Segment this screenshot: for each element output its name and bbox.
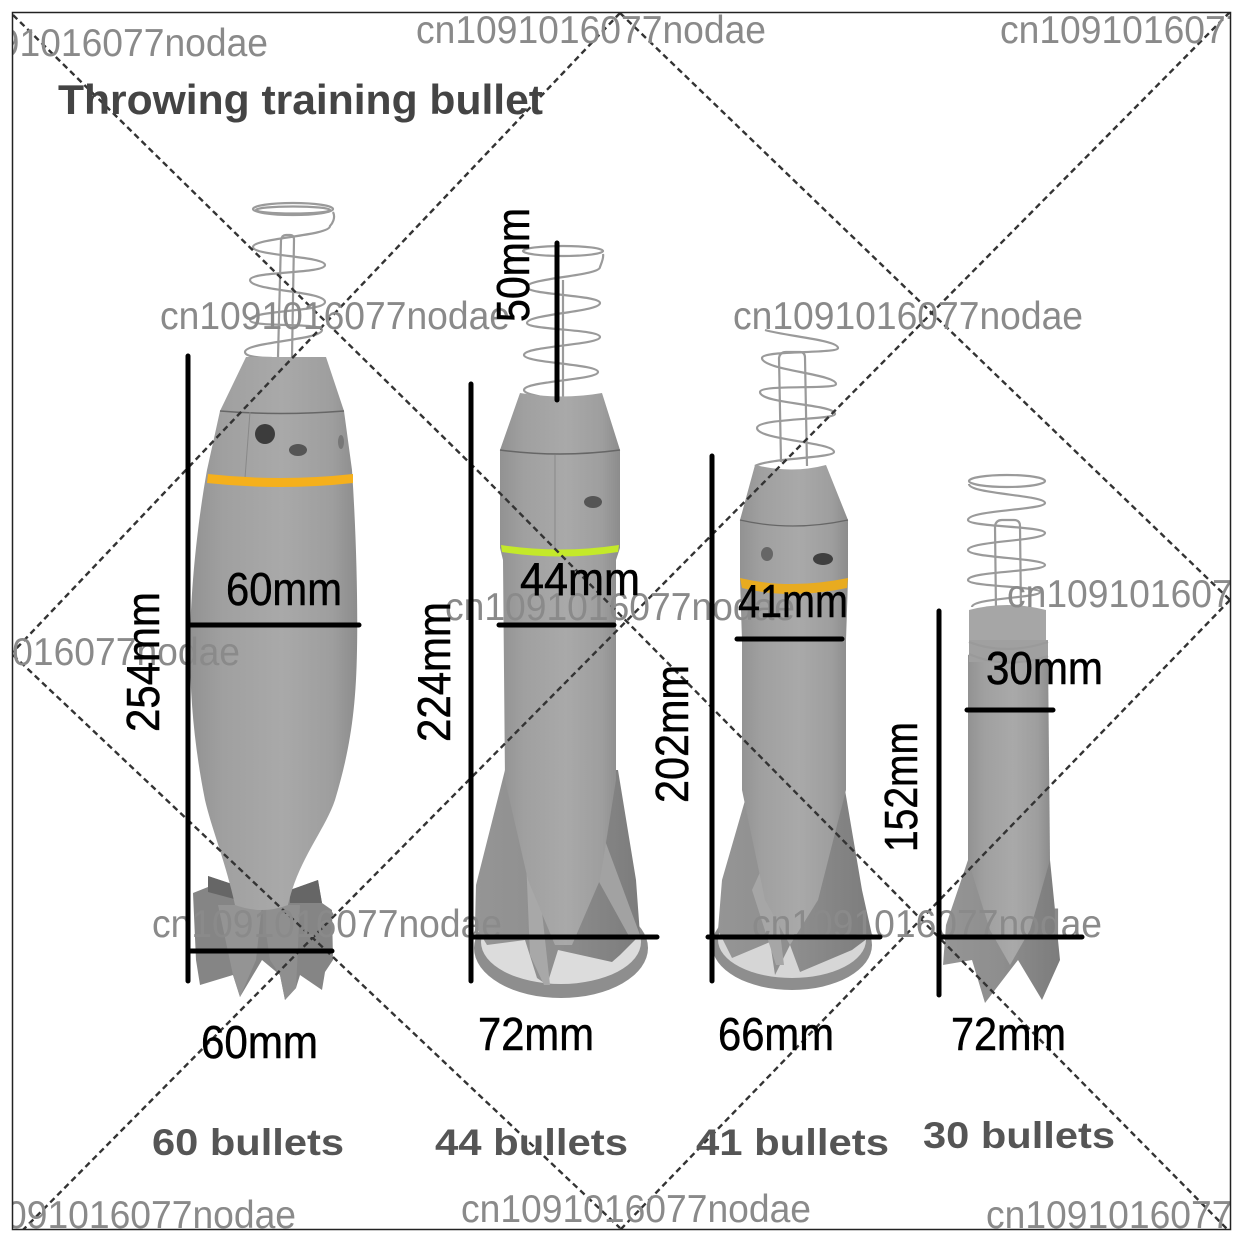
watermark text: cn1091016077nodae [733,295,1083,338]
dimension labels: 60mm [201,1016,318,1068]
hole 44 [584,496,602,508]
dimension labels: 44mm [520,553,640,605]
caption: 30 bullets: 30 bullets [923,1115,1115,1156]
watermark text: cn1091016077nodae [160,295,510,338]
fins 60 [193,876,333,1000]
dimension lines [188,243,1082,995]
caption: 41 bullets: 41 bullets [696,1122,889,1163]
bullet 30: slim model with fins [943,475,1060,1003]
bullet 41: short model with base ring [712,330,872,990]
dimension labels: 41mm [738,575,848,627]
title: Throwing training bullet [58,76,543,123]
dimension labels: 50mm [487,208,539,322]
green band 44 [501,545,619,556]
spring 41 [755,330,838,466]
spring 30 [968,475,1045,612]
dimension labels: 152mm [875,722,927,852]
dimension labels: 30mm [986,642,1103,694]
watermark text: cn1091016077nodae [752,903,1102,946]
holes 60 [255,424,344,456]
dimension labels: 66mm [718,1008,834,1060]
fins 44 [475,770,640,985]
spring 44 [523,246,603,400]
fins 41 [718,790,872,975]
dimension labels: 254mm [117,592,169,732]
body 44 [500,393,620,945]
dimension labels: 60mm [226,563,342,615]
body 30 [969,605,1046,640]
bullet 60: mortar model with spring [190,203,357,1000]
watermark text: cn1091016077nodae [152,903,502,946]
bullet 44: tube model with base ring [474,246,648,998]
caption: 60 bullets: 60 bullets [152,1122,344,1163]
dimension labels: 72mm [478,1008,594,1060]
holes 41 [761,547,833,565]
dimension labels: 202mm [646,665,698,803]
yellow band 41 [740,578,848,594]
spring 60 [245,203,334,358]
dimension labels: 224mm [408,602,460,742]
fins 30 [943,860,1060,1003]
base ring 44 [474,898,648,998]
body 41 [740,465,848,945]
watermark text: cn1091016077nodae [445,586,795,629]
body 60 [190,357,357,910]
yellow band 60 [207,474,353,487]
dimension labels [117,208,1103,1068]
spring collar 30 [969,642,1048,663]
watermark text: cn1091016077nodae [461,1188,811,1231]
caption: 44 bullets: 44 bullets [435,1122,628,1163]
dimension labels: 72mm [951,1008,1066,1060]
base ring 41 [712,900,872,990]
watermark text: cn1091016077nodae [416,9,766,52]
